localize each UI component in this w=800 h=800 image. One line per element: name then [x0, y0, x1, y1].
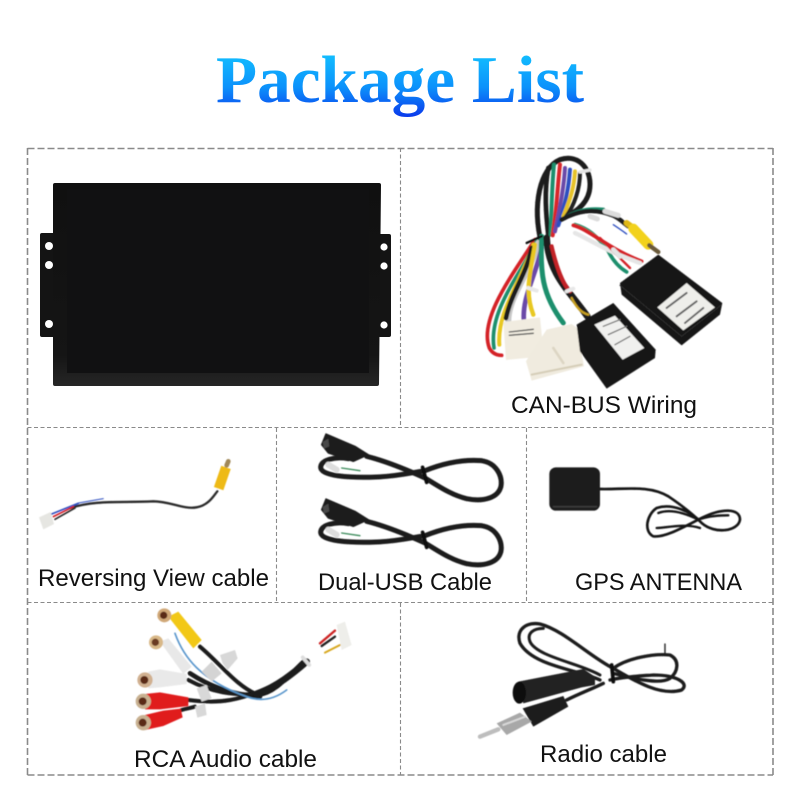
- RCA cable picture: [136, 608, 352, 730]
- label: Reversing View cable: [38, 565, 269, 592]
- white connector 1: [503, 317, 544, 360]
- white plug: [160, 638, 192, 674]
- label: Dual-USB Cable: [318, 569, 492, 596]
- blue wire: [175, 633, 287, 699]
- labels tags: [220, 650, 238, 670]
- black module: [577, 303, 656, 389]
- radio cable picture: [480, 624, 684, 737]
- label: GPS ANTENNA: [575, 569, 742, 596]
- red plug: [145, 692, 188, 709]
- cable: [70, 491, 217, 508]
- barrel socket: [518, 669, 595, 703]
- panel: dual USB cable: [318, 434, 501, 596]
- yellow RCA plug: [627, 223, 633, 228]
- second cable strand: [657, 511, 728, 528]
- CAN-BUS harness picture: [487, 158, 722, 389]
- GPS antenna picture: [549, 467, 740, 536]
- panel: GPS antenna: [549, 467, 742, 596]
- panel: head unit: [40, 183, 391, 386]
- label: CAN-BUS Wiring: [511, 392, 697, 419]
- cable loops: [519, 624, 684, 700]
- antenna puck: [549, 467, 600, 511]
- decoder box: [620, 255, 722, 345]
- red plug 2: [145, 709, 183, 730]
- plug tip: [227, 461, 228, 465]
- label: RCA Audio cable: [134, 746, 317, 773]
- multi-pin connector: [320, 631, 335, 643]
- wires to decoder: [562, 211, 642, 272]
- display screen: [67, 189, 369, 373]
- icon: mounting ears: [40, 233, 391, 337]
- panel: RCA audio cable: [134, 608, 352, 773]
- reversing cable picture: [39, 461, 228, 529]
- wire loop: [537, 158, 603, 245]
- label: Radio cable: [540, 741, 667, 768]
- icon: mounting holes: [45, 242, 388, 329]
- black cables: [182, 647, 307, 710]
- plug tip: [480, 729, 498, 737]
- panel: reversing view cable: [38, 461, 269, 592]
- wire bundle to connector: [487, 236, 588, 355]
- yellow plug: [168, 612, 202, 648]
- plug body: [523, 696, 568, 727]
- fan-out wires: [52, 503, 78, 514]
- metal plug: [497, 713, 532, 735]
- USB cable bottom: [321, 499, 501, 565]
- panel: CAN-BUS wiring: [487, 158, 722, 419]
- grid of dashed panels: [28, 148, 773, 775]
- title: Package List: [216, 43, 585, 117]
- cable: [600, 488, 740, 536]
- small connectors: [590, 211, 618, 219]
- panel: radio cable: [480, 624, 684, 768]
- USB cable top: [321, 434, 501, 500]
- white connector 2: [526, 324, 584, 381]
- yellow plug: [219, 467, 226, 489]
- white plug 2: [148, 669, 187, 688]
- display housing: [53, 183, 381, 386]
- white connector: [39, 512, 54, 529]
